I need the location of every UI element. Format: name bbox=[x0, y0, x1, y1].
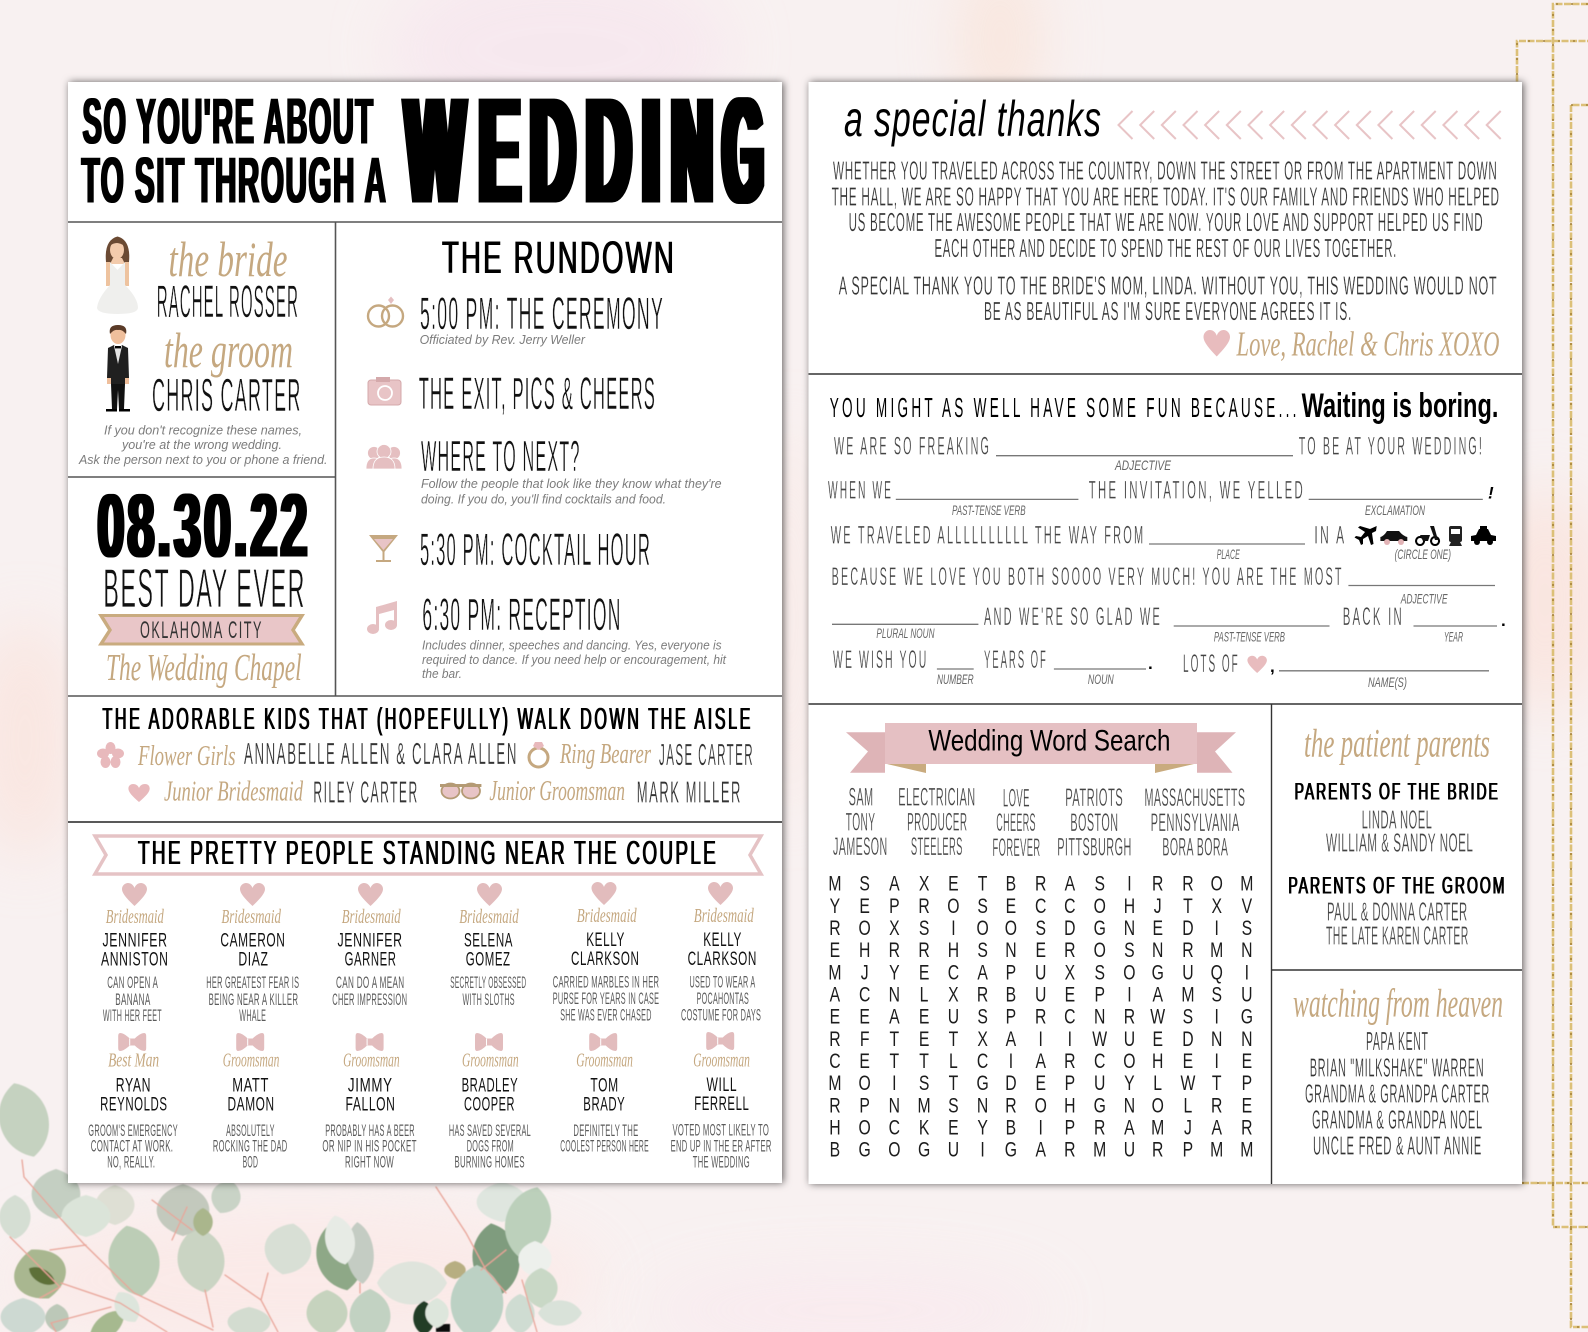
line 6: NUMBER bbox=[937, 671, 974, 687]
word list: ELECTRICIAN bbox=[898, 784, 976, 812]
card: Jennifer Garner: GARNER bbox=[345, 950, 396, 971]
card: Matt Damon: BOD bbox=[243, 1153, 258, 1172]
left panel: MARK MILLER bbox=[637, 775, 742, 810]
word search grid: HOCKEYBIPRAMJAR bbox=[829, 1115, 1253, 1139]
line 6: NOUN bbox=[1088, 671, 1114, 687]
ring bearer: Ring Bearer bbox=[559, 739, 651, 770]
card: Bradley Cooper bbox=[449, 1033, 531, 1172]
item: ceremony bbox=[368, 288, 664, 347]
panel: wedding party: PROBABLY HAS A BEER bbox=[325, 1121, 415, 1140]
card: Jimmy Fallon: JIMMY bbox=[348, 1076, 393, 1097]
panel: wedding party: HER GREATEST FEAR IS bbox=[206, 973, 299, 992]
ribbon: Oklahoma City: OKLAHOMA CITY bbox=[140, 617, 263, 644]
banner bbox=[846, 723, 1236, 773]
item: where to next bbox=[366, 432, 722, 506]
panel: kids: ANNABELLE ALLEN & CLARA ALLEN bbox=[244, 736, 518, 771]
parents of the bride: LINDA NOEL bbox=[1362, 804, 1432, 834]
word search grid: MOISTGDEPUYLWTP bbox=[828, 1071, 1252, 1095]
card: Matt Damon: MATT bbox=[232, 1076, 269, 1097]
card: Kelly Clarkson bridesmaid two: POCAHONTAS bbox=[697, 989, 749, 1008]
item: reception bbox=[367, 589, 727, 681]
line 1 bbox=[834, 432, 1484, 473]
line 5 bbox=[832, 603, 1506, 644]
left panel: 5:00 PM: THE CEREMONY bbox=[420, 288, 664, 339]
word list: STEELERS bbox=[911, 833, 963, 861]
text: END UP IN THE ER AFTER bbox=[671, 1136, 772, 1156]
panel: bride and groom bbox=[78, 231, 328, 467]
card: Tom Brady: Groomsman bbox=[576, 1050, 633, 1072]
icon: ring bbox=[529, 742, 548, 767]
panel: wedding party: CONTACT AT WORK. bbox=[91, 1137, 173, 1156]
item: reception: 6:30 PM: RECEPTION bbox=[422, 589, 622, 640]
icon: sunglasses bbox=[440, 784, 481, 798]
card: Jimmy Fallon bbox=[322, 1033, 417, 1172]
card: Tom Brady: BRADY bbox=[583, 1095, 625, 1116]
icon: groom bbox=[106, 325, 130, 412]
card: Matt Damon: ABSOLUTELY bbox=[226, 1121, 275, 1140]
branches bbox=[10, 1160, 537, 1332]
parents of the groom bbox=[1288, 872, 1506, 950]
panel: wedding party: GROOM'S EMERGENCY bbox=[88, 1121, 178, 1140]
icons: transport bbox=[1354, 526, 1496, 546]
line 2: WHEN WE bbox=[828, 477, 893, 505]
label: the bride: the bride bbox=[168, 231, 288, 287]
title: SO YOU'RE ABOUT bbox=[82, 84, 374, 158]
icon: music note bbox=[367, 601, 397, 634]
panel: watching from heaven bbox=[1293, 981, 1503, 1160]
word search grid: MSAXETBRASIRROM bbox=[828, 871, 1253, 895]
junior bridesmaid: Junior Bridesmaid bbox=[164, 777, 304, 808]
card: Cameron Diaz bbox=[206, 883, 299, 1025]
item: where to next: WHERE TO NEXT? bbox=[421, 432, 580, 481]
line 5: . bbox=[1501, 611, 1506, 630]
heading: THE ADORABLE KIDS THAT (HOPEFULLY) WALK DOWN THE AISLE bbox=[102, 701, 753, 736]
title: TO SIT THROUGH A bbox=[82, 144, 388, 216]
ribbon: Oklahoma City bbox=[98, 614, 305, 646]
word list: PATRIOTS bbox=[1065, 784, 1123, 812]
word list bbox=[833, 784, 1246, 862]
card: Matt Damon: Groomsman bbox=[223, 1050, 279, 1072]
card: Cameron Diaz: Bridesmaid bbox=[221, 906, 282, 928]
line 2: ! bbox=[1488, 484, 1494, 503]
line 5: BACK IN bbox=[1343, 603, 1404, 631]
card: Cameron Diaz: CAMERON bbox=[220, 931, 286, 952]
card: Bradley Cooper: Groomsman bbox=[462, 1050, 519, 1072]
line 5: PAST-TENSE VERB bbox=[1214, 628, 1285, 644]
line 5: PLURAL NOUN bbox=[876, 625, 935, 641]
card: Bradley Cooper: DOGS FROM bbox=[467, 1137, 514, 1156]
item: reception: required to dance. If you need help or encouragement, hit bbox=[422, 652, 727, 667]
word search grid: ROXSIOOSDGNEDIS bbox=[829, 916, 1252, 940]
card: Jimmy Fallon: Groomsman bbox=[343, 1050, 400, 1072]
card: Selena Gomez bbox=[450, 883, 526, 1009]
line 3: WE TRAVELED ALLLLLLLLLL THE WAY FROM bbox=[831, 522, 1145, 550]
word list: PITTSBURGH bbox=[1057, 834, 1132, 862]
line 4 bbox=[832, 563, 1495, 606]
right panel: MASSACHUSETTS bbox=[1144, 784, 1246, 812]
thank you paragraphs bbox=[832, 155, 1500, 326]
label: the groom: the groom bbox=[164, 322, 293, 378]
text: JASE CARTER bbox=[659, 737, 754, 772]
panel: wedding party bbox=[88, 834, 772, 1172]
card: Ryan Reynolds: RYAN bbox=[116, 1076, 151, 1097]
panel: the rundown bbox=[366, 232, 727, 681]
title: D bbox=[586, 66, 631, 234]
panel: wedding party: USED TO WEAR A bbox=[690, 972, 756, 992]
word search grid: MJYECAPUXSOGUQI bbox=[828, 960, 1249, 984]
icon: cocktail bbox=[369, 535, 398, 562]
card: Tom Brady: TOM bbox=[590, 1076, 619, 1097]
card: Ryan Reynolds: Best Man bbox=[108, 1050, 159, 1072]
word search grid: ACNLXRBUEPIAMSU bbox=[830, 982, 1253, 1006]
icon: heart bbox=[128, 784, 150, 802]
left panel bbox=[68, 66, 782, 1183]
line 2: PAST-TENSE VERB bbox=[952, 502, 1026, 518]
card: Will Ferrell bbox=[671, 1032, 772, 1172]
banner: Wedding Word Search bbox=[928, 725, 1170, 758]
panel: patient parents bbox=[1288, 721, 1506, 950]
word search grid: EEAEUSPRCNRWSIG bbox=[830, 1004, 1253, 1028]
date: 08.30.22 bbox=[97, 476, 310, 576]
title: I bbox=[642, 66, 660, 234]
panel: wedding party: CAN DO A MEAN bbox=[336, 973, 404, 992]
card: Matt Damon bbox=[213, 1033, 288, 1172]
card: Jennifer Anniston: CAN OPEN A bbox=[107, 973, 158, 992]
card: Cameron Diaz: WHALE bbox=[239, 1006, 266, 1025]
left panel: 5:30 PM: COCKTAIL HOUR bbox=[420, 524, 651, 575]
flower girls: Flower Girls bbox=[137, 741, 236, 772]
icon: bride bbox=[97, 236, 138, 314]
panel: wedding party: BURNING HOMES bbox=[454, 1153, 525, 1172]
card: Kelly Clarkson bridesmaid one: CLARKSON bbox=[571, 949, 639, 970]
panel: wedding party: COOLEST PERSON HERE bbox=[560, 1137, 649, 1156]
item: cocktail hour bbox=[369, 524, 651, 575]
card: Jennifer Anniston bbox=[101, 883, 168, 1025]
card: Kelly Clarkson bridesmaid two: Bridesmaid bbox=[694, 905, 754, 927]
item: where to next: doing. If you do, you'll find cocktails and food. bbox=[421, 492, 666, 506]
line 4: ADJECTIVE bbox=[1400, 590, 1448, 606]
left panel: RACHEL ROSSER bbox=[157, 276, 299, 327]
line 5: YEAR bbox=[1444, 628, 1463, 644]
card: Kelly Clarkson bridesmaid two: CLARKSON bbox=[688, 949, 757, 970]
chevrons bbox=[1118, 111, 1501, 139]
icon: people bbox=[366, 444, 402, 469]
panel: special thanks bbox=[832, 91, 1501, 364]
panel: wedding party: ROCKING THE DAD bbox=[213, 1137, 288, 1156]
word search grid bbox=[828, 871, 1253, 1161]
word list: FOREVER bbox=[992, 834, 1041, 862]
word list: SAM bbox=[849, 784, 874, 812]
panel: wedding party: CHER IMPRESSION bbox=[332, 990, 407, 1009]
icon: rings bbox=[368, 296, 403, 326]
line 6 bbox=[833, 646, 1489, 690]
title: W bbox=[406, 66, 465, 234]
icon: flower bbox=[97, 742, 124, 768]
card: Kelly Clarkson bridesmaid two: KELLY bbox=[703, 930, 742, 951]
card: Jennifer Anniston: ANNISTON bbox=[101, 950, 168, 971]
card: Jennifer Garner: Bridesmaid bbox=[342, 906, 401, 928]
word search grid: BGOGUIGARMURPMM bbox=[830, 1137, 1253, 1161]
panel: date and venue bbox=[97, 476, 310, 689]
panel: wedding party: PURSE FOR YEARS IN CASE bbox=[553, 989, 659, 1008]
line 6: LOTS OF bbox=[1183, 650, 1240, 678]
panel: word search bbox=[828, 723, 1253, 1161]
card: Kelly Clarkson bridesmaid one: KELLY bbox=[586, 930, 625, 951]
card: Tom Brady bbox=[560, 1033, 649, 1156]
title: D bbox=[530, 66, 575, 234]
line 2: EXCLAMATION bbox=[1365, 502, 1426, 518]
title bbox=[82, 66, 763, 234]
card: Jennifer Anniston: BANANA bbox=[115, 990, 151, 1009]
card: Bradley Cooper: BRADLEY bbox=[462, 1076, 518, 1097]
card: Matt Damon: DAMON bbox=[228, 1095, 275, 1116]
ribbon heading: THE PRETTY PEOPLE STANDING NEAR THE COUPLE bbox=[138, 834, 718, 871]
left panel: THE EXIT, PICS & CHEERS bbox=[419, 368, 656, 419]
ribbon heading bbox=[95, 834, 761, 874]
junior groomsman: Junior Groomsman bbox=[489, 776, 625, 807]
line 3: (CIRCLE ONE) bbox=[1395, 546, 1451, 562]
note: wrong wedding bbox=[78, 422, 328, 467]
note: wrong wedding: you're at the wrong wedding. bbox=[121, 437, 282, 452]
card: Ryan Reynolds: REYNOLDS bbox=[100, 1095, 168, 1116]
line 3 bbox=[831, 522, 1496, 562]
panel: kids bbox=[97, 701, 754, 810]
item: reception: Includes dinner, speeches and dancing. Yes, everyone is bbox=[422, 638, 722, 653]
panel: wedding party: CARRIED MARBLES IN HER bbox=[553, 972, 659, 992]
word search grid: EHRRHSNEROSNRMN bbox=[830, 938, 1253, 962]
card: Selena Gomez: GOMEZ bbox=[466, 950, 511, 971]
card: Selena Gomez: Bridesmaid bbox=[459, 906, 519, 928]
heading: Waiting is boring. bbox=[1302, 387, 1498, 425]
card: Jennifer Garner: JENNIFER bbox=[338, 931, 403, 952]
line 2 bbox=[828, 477, 1494, 518]
word list: BOSTON bbox=[1070, 809, 1118, 837]
item: exit bbox=[368, 368, 656, 419]
line 6: NAME(S) bbox=[1368, 674, 1407, 690]
eucalyptus leaves bbox=[0, 1077, 582, 1332]
line 6: YEARS OF bbox=[984, 646, 1048, 674]
line 2: THE INVITATION, WE YELLED bbox=[1089, 477, 1305, 505]
card: Bradley Cooper: COOPER bbox=[464, 1095, 515, 1116]
panel: wedding party: OR NIP IN HIS POCKET bbox=[322, 1137, 417, 1156]
word list: BORA BORA bbox=[1162, 834, 1228, 862]
left panel: VOTED MOST LIKELY TO bbox=[672, 1120, 769, 1140]
card: Ryan Reynolds: NO, REALLY. bbox=[107, 1153, 155, 1172]
panel: wedding party: HAS SAVED SEVERAL bbox=[449, 1121, 531, 1140]
panel: wedding party: SHE WAS EVER CHASED bbox=[560, 1006, 652, 1024]
panel: wedding party: BEING NEAR A KILLER bbox=[209, 990, 298, 1009]
title: E bbox=[479, 66, 520, 234]
icon: camera bbox=[368, 377, 401, 405]
item: reception: the bar. bbox=[422, 666, 462, 681]
card: Tom Brady: DEFINITELY THE bbox=[573, 1121, 638, 1140]
left panel: CHRIS CARTER bbox=[152, 369, 302, 421]
parents of the bride bbox=[1295, 778, 1500, 858]
line 1: WE ARE SO FREAKING bbox=[834, 432, 991, 460]
word list: PRODUCER bbox=[907, 808, 968, 836]
line 6: WE WISH YOU bbox=[833, 646, 928, 674]
card: Selena Gomez: SELENA bbox=[464, 931, 513, 952]
card: Jimmy Fallon: FALLON bbox=[346, 1095, 396, 1116]
card: Jennifer Garner bbox=[332, 883, 407, 1009]
panel: word search: PENNSYLVANIA bbox=[1151, 809, 1240, 837]
names: PAPA KENT bbox=[1366, 1026, 1429, 1056]
line 6: , bbox=[1270, 657, 1275, 676]
card: Will Ferrell: Groomsman bbox=[693, 1050, 750, 1072]
item: ceremony: Officiated by Rev. Jerry Weller bbox=[420, 332, 586, 347]
line 3: PLACE bbox=[1217, 546, 1240, 562]
word list: JAMESON bbox=[833, 833, 888, 861]
title: N bbox=[672, 66, 712, 234]
word search grid: CETTLCIARCOHEIE bbox=[829, 1049, 1252, 1073]
word search grid: RPNMSNROHGNOLRE bbox=[829, 1093, 1252, 1117]
names bbox=[1305, 1026, 1490, 1160]
line 5: AND WE'RE SO GLAD WE bbox=[984, 603, 1162, 631]
word list: CHEERS bbox=[996, 809, 1036, 837]
card: Jennifer Anniston: JENNIFER bbox=[102, 931, 168, 952]
word list: TONY bbox=[846, 808, 876, 836]
card: Will Ferrell: FERRELL bbox=[694, 1094, 749, 1115]
word search grid: YEPROSECCOHJTXV bbox=[830, 894, 1253, 917]
word search grid: RFTETXAIIWUEDNN bbox=[829, 1027, 1253, 1050]
line 3: IN A bbox=[1314, 522, 1346, 550]
icon: heart bbox=[1204, 330, 1230, 356]
word list: LOVE bbox=[1003, 784, 1030, 812]
card: Will Ferrell: WILL bbox=[706, 1075, 737, 1096]
item: where to next: Follow the people that look like they know what they're bbox=[421, 476, 722, 491]
card: Cameron Diaz: DIAZ bbox=[238, 950, 269, 971]
card: Kelly Clarkson bridesmaid one: Bridesmaid bbox=[577, 905, 637, 927]
panel: wedding party: SECRETLY OBSESSED bbox=[450, 973, 526, 992]
card: Jennifer Anniston: Bridesmaid bbox=[106, 906, 164, 928]
left panel: BEST DAY EVER bbox=[103, 557, 306, 619]
card: Will Ferrell: THE WEDDING bbox=[693, 1152, 750, 1172]
line 1: ADJECTIVE bbox=[1114, 457, 1171, 473]
panel: kids: RILEY CARTER bbox=[313, 775, 419, 810]
panel: wedding party: WITH HER FEET bbox=[103, 1006, 162, 1025]
panel: mad lib bbox=[828, 387, 1506, 690]
heading: a special thanks bbox=[844, 91, 1102, 147]
note: wrong wedding: If you don't recognize these names, bbox=[104, 422, 302, 438]
right panel bbox=[808, 82, 1522, 1184]
card: Selena Gomez: WITH SLOTHS bbox=[462, 990, 515, 1009]
heading: THE RUNDOWN bbox=[442, 232, 676, 283]
gold frames bbox=[1517, 4, 1588, 1327]
left panel: COSTUME FOR DAYS bbox=[681, 1006, 761, 1024]
line 6: . bbox=[1148, 654, 1153, 673]
card: Kelly Clarkson bridesmaid two bbox=[681, 882, 761, 1024]
card: Ryan Reynolds bbox=[88, 1033, 178, 1172]
left panel: G bbox=[723, 66, 763, 234]
card: Jimmy Fallon: RIGHT NOW bbox=[345, 1153, 394, 1172]
venue: The Wedding Chapel bbox=[106, 647, 302, 689]
card: Kelly Clarkson bridesmaid one bbox=[553, 882, 659, 1024]
note: wrong wedding: Ask the person next to you or phone a friend. bbox=[78, 452, 328, 467]
